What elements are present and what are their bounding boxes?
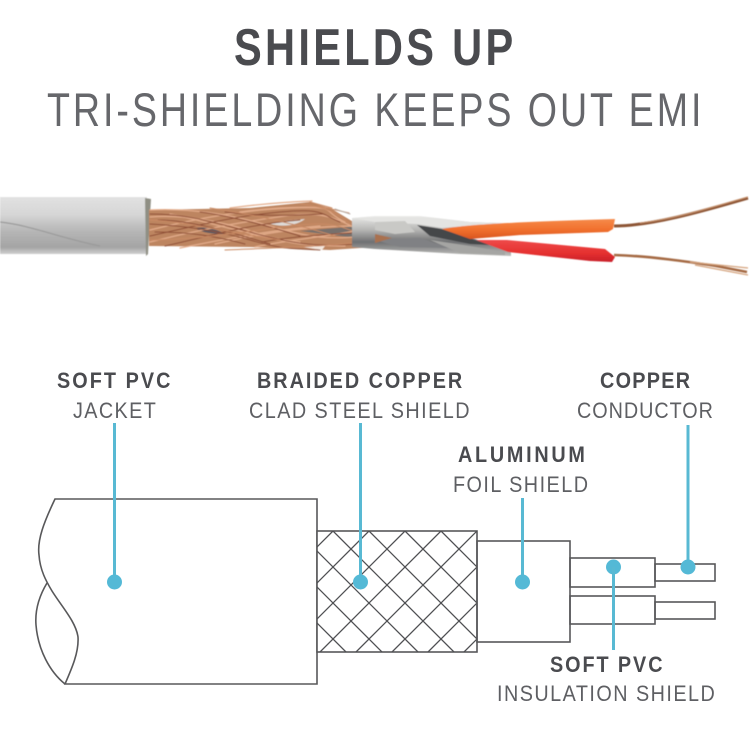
bottom insulation [570,596,655,624]
bottom conductor [655,602,715,619]
aluminum foil [352,216,511,256]
red insulated wire [476,240,615,262]
foil shield outline [477,541,570,642]
cable jacket [0,197,151,256]
copper conductors [614,197,748,275]
photo: stripped cable [0,197,748,275]
callout: insulation shield [497,560,715,706]
callout: insulation shield: SOFT PVC [550,653,663,677]
callout: soft pvc jacket: JACKET [73,399,156,423]
callout: insulation shield: INSULATION SHIELD [497,682,715,706]
braided shield [316,530,478,653]
callout: braided copper: BRAIDED COPPER [257,369,462,393]
title [47,18,701,137]
callout: braided copper [249,369,470,590]
callout: aluminum foil: FOIL SHIELD [453,473,588,497]
callout: copper conductor [577,369,713,574]
callout: soft pvc jacket: SOFT PVC [57,369,170,393]
subheading: TRI-SHIELDING KEEPS OUT EMI [47,84,701,137]
callout: copper conductor: CONDUCTOR [577,399,713,423]
orange insulated wire [442,219,615,239]
copper braid [149,201,375,250]
callout: soft pvc jacket [57,369,170,590]
callout: aluminum foil [453,443,588,590]
callout: copper conductor: COPPER [600,369,690,393]
top conductor [655,564,715,581]
heading: shields up: SHIELDS UP [234,18,513,76]
diagram: cable cross-section [36,499,715,684]
callout: braided copper: CLAD STEEL SHIELD [249,399,470,423]
jacket outline [36,499,317,684]
top insulation [570,558,655,587]
callout: aluminum foil: ALUMINUM [458,443,585,467]
